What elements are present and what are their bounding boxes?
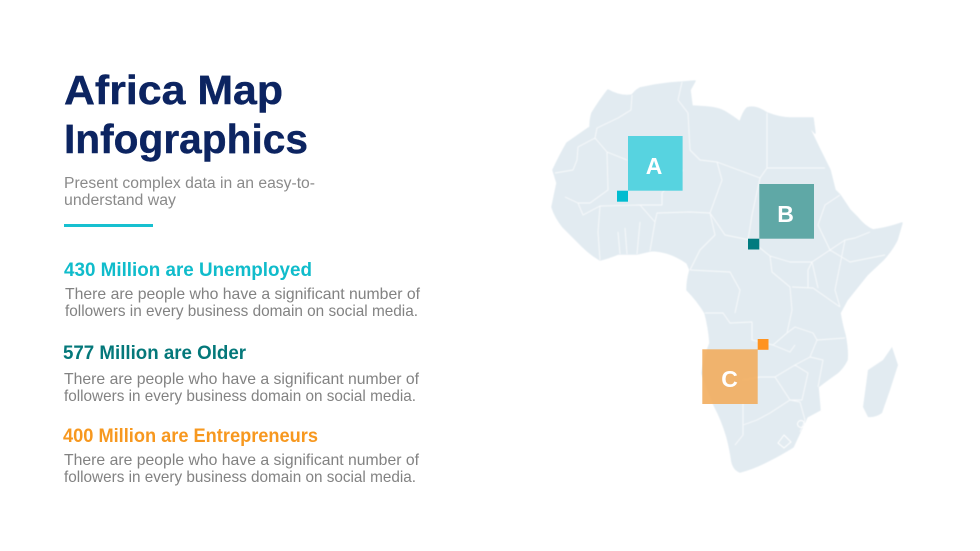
dot C bbox=[758, 339, 768, 350]
marker A bbox=[617, 136, 683, 202]
accent rule bbox=[64, 224, 153, 227]
dot B bbox=[748, 239, 759, 250]
heading: older: 577 Million are Older bbox=[63, 343, 247, 364]
item: older bbox=[63, 343, 420, 405]
title: Africa Map bbox=[64, 67, 283, 113]
square A bbox=[628, 136, 683, 191]
text: older description: followers in every business domain on social media. bbox=[64, 388, 416, 405]
text: entrepreneurs description bbox=[64, 452, 420, 486]
dot A bbox=[617, 191, 628, 202]
text: older description bbox=[64, 371, 420, 405]
title bbox=[64, 67, 308, 162]
letter A: A bbox=[646, 153, 662, 179]
map of Africa bbox=[552, 81, 902, 472]
item: unemployed bbox=[64, 260, 421, 320]
item: entrepreneurs bbox=[63, 426, 420, 486]
text: unemployed description: followers in every business domain on social media. bbox=[65, 303, 418, 320]
continent outline bbox=[552, 81, 902, 472]
subtitle: Present complex data in an easy-to- bbox=[64, 175, 315, 192]
island: Madagascar bbox=[863, 347, 898, 417]
subtitle: understand way bbox=[64, 192, 176, 209]
square B bbox=[759, 184, 814, 239]
letter B: B bbox=[777, 201, 794, 227]
heading: unemployed: 430 Million are Unemployed bbox=[64, 260, 312, 281]
text: unemployed description bbox=[65, 286, 421, 320]
square C bbox=[702, 349, 758, 404]
text: entrepreneurs description: There are people who have a significant number of bbox=[64, 452, 420, 469]
enclaves: Lesotho and Eswatini bbox=[778, 420, 804, 448]
heading: entrepreneurs: 400 Million are Entrepreneurs bbox=[63, 426, 318, 447]
country borders bbox=[555, 82, 885, 445]
marker C bbox=[702, 339, 768, 404]
marker B bbox=[748, 184, 814, 250]
text: entrepreneurs description: followers in every business domain on social media. bbox=[64, 469, 416, 486]
text: unemployed description: There are people who have a significant number of bbox=[65, 286, 421, 303]
subtitle bbox=[64, 175, 315, 209]
title: Infographics bbox=[64, 116, 308, 162]
letter C: C bbox=[721, 366, 738, 392]
text: older description: There are people who have a significant number of bbox=[64, 371, 420, 388]
